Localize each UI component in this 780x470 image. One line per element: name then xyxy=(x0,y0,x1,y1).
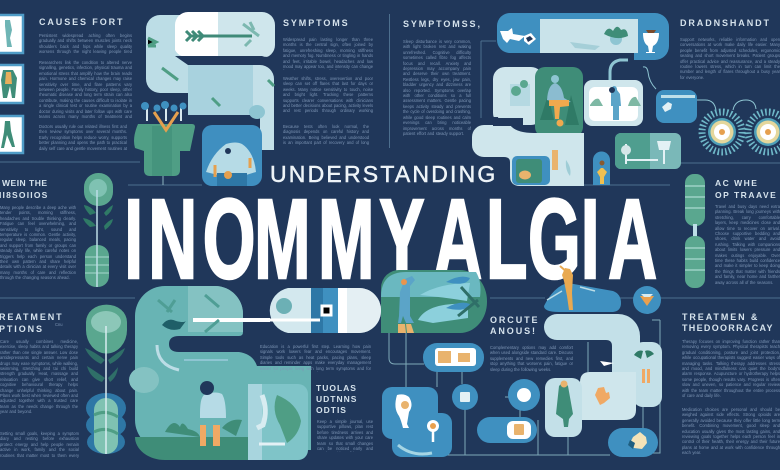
heading: vein: WEIN THE xyxy=(2,178,48,188)
panel: top right blue band xyxy=(497,13,669,80)
icon: bottom left plant xyxy=(85,305,127,454)
panel: right pale flow shape xyxy=(544,314,662,437)
panel: lower pale flow shape xyxy=(472,117,584,186)
icon: small circle badge xyxy=(452,384,478,410)
icon: blue capsule with parcels xyxy=(423,343,484,372)
heading: causes: CAUSES FORT xyxy=(39,17,124,27)
heading: right middle one: AC WHE xyxy=(715,178,758,188)
heading: understanding: UNDERSTANDING xyxy=(270,161,498,187)
icon: circle with orange flower xyxy=(633,286,661,314)
panel: green blob with figure xyxy=(381,270,487,333)
text: right top: Support networks, reliable information and open conversations at work make daily life easier. Many people benefit from adjusted schedules, ergonomic seating and short movement breaks. Patient groups offer practical advice and reassurance, and a steady routine lowers stress, which in turn can limit the number and length of flares throughout a busy year for everyone. xyxy=(680,37,780,80)
icon: blue capsule with gem xyxy=(608,428,658,457)
icon: blue boat with figure xyxy=(544,266,621,312)
icon: left plant xyxy=(83,173,113,287)
text: left middle: Many people describe a deep ache with tender points, morning stiffness, headaches and trouble thinking clearly. Fatigue can feel overwhelming, and sensitivity to light, sound and temperature is common. Gentle activity, regular sleep, balanced meals, pacing and support from family or groups can steady daily life, while careful notes on triggers help each person understand their own pattern and share helpful details with a clinician at every visit over many months of care and reflection through the changing seasons ahead. xyxy=(0,205,76,280)
text: orcute: Complementary options may add comfort when used alongside standard care. Discuss supplements and new remedies first, and stop anything that worsens pain, fatigue or sleep during the following weeks. xyxy=(490,345,573,372)
heading: tools two: UDTNNS xyxy=(316,394,357,404)
connectors: bottom network xyxy=(389,310,660,455)
heading: tools: TUOLAS xyxy=(316,383,357,393)
panel: white card with standing figure xyxy=(584,80,643,126)
text: treatment first: Care usually combines medicine, exercise, sleep habits and talking therapy rather than one single answer. Low dose antidepressants and certain nerve pain drugs may ease symptoms, while walking, swimming, stretching and tai chi build strength gradually. Heat, massage and relaxation can give short relief, and cognitive behavioural therapy helps change unhelpful thinking about pain. Plans work best when reviewed often and adjusted together with a trusted care team as the needs change through the year and beyond. xyxy=(0,339,78,414)
icon: striped capsule xyxy=(265,288,381,333)
panel: pale card with leaf icon xyxy=(493,67,543,125)
panel: blue card with connector arcs xyxy=(643,67,756,123)
icon: blue arch with figure xyxy=(593,152,610,185)
icon: green tunic with blue nodes xyxy=(134,101,195,185)
panel: green card with seated figure xyxy=(535,67,583,137)
panel: blue card with keyhole icons xyxy=(382,387,452,457)
heading: right middle two: OP TRAAVE xyxy=(715,190,777,200)
heading: anous: ANOUS! xyxy=(490,326,537,336)
text: symptoms column: Sleep disturbance is very common, with light broken rest and waking unrefreshed. Cognitive difficulty sometimes called fibro fog affects focus and recall. Anxiety and depression may accompany pain and deserve their own treatment. Restless legs, dry eyes, jaw pain, bladder urgency and dizziness are also reported. Symptoms overlap with other conditions so a full assessment matters. Gentle pacing keeps activity steady and prevents the cycle of overdoing and crashing, while good sleep routines and calm evenings can bring noticeable improvement across months of patient effort and steady support. xyxy=(403,39,471,136)
icon: blue capsule with badge xyxy=(477,417,537,443)
divider: symptoms columns xyxy=(389,14,390,148)
icon: radial sun flowers xyxy=(702,112,780,152)
heading: treatment: REATMENT xyxy=(0,312,64,322)
heading: tools three: ODTIS xyxy=(316,405,347,415)
icons: cause figures xyxy=(0,15,23,153)
text: right middle: Travel and busy days need extra planning. Break long journeys with stretching, carry comfortable layers, keep medicines close and allow time to recover on arrival. Choose supportive bedding and shoes, drink water and avoid rushing. Talking with companions about limits lowers pressure and makes outings enjoyable. Over time these habits build confidence and make it simpler to keep doing the things that matter with friends and family, near home and farther away across all of the seasons. xyxy=(715,204,780,285)
heading: symptoms: SYMPTOMS xyxy=(283,18,350,28)
panel: top centre flow shape xyxy=(146,12,275,150)
panel: blue square with seated figure xyxy=(202,125,262,186)
heading: treatment right one: TREATMEN & xyxy=(682,312,759,322)
label: small note: Cnu xyxy=(55,322,63,327)
panel: bottom teal flow shape xyxy=(129,286,311,460)
title: main word: INOMMYALGIA xyxy=(124,176,657,302)
icon: right plant xyxy=(685,174,705,288)
icon: blue circle with white dot xyxy=(508,379,540,411)
text: treatment right second: Medication choices are personal and should be weighed against side effects. Strong opioids are generally avoided because they offer little long term benefit. Combining movement, good sleep and education usually gives the most lasting gains, and reviewing goals together helps each person feel in control of their health, their energy and their future plans at home and at work with confidence through each year. xyxy=(682,407,780,455)
heading: options: PTIONS xyxy=(0,324,44,334)
heading: sub: II8SOIIOS xyxy=(0,190,49,200)
panel: teal two-tone card xyxy=(615,133,681,169)
heading: right top: DRADNSHANDT xyxy=(680,18,771,28)
text: treatment right first: Therapy focuses on improving function rather than removing every symptom. Physical therapists teach gradual conditioning, posture and joint protection, while occupational therapists suggest easier ways of managing tasks. Talking therapy addresses stress and mood, and mindfulness can quiet the body's alarm response. Acupuncture or hydrotherapy helps some people, though results vary. Progress is often slow and uneven, so patience and regular review with the team matter throughout the entire process of care and daily life. xyxy=(682,339,780,398)
heading: symptoms second column: SYMPTOMSS, xyxy=(403,19,482,29)
heading: orcute: ORCUTE xyxy=(490,315,539,325)
heading: treatment right two: THEDOORRACAY xyxy=(682,323,774,333)
